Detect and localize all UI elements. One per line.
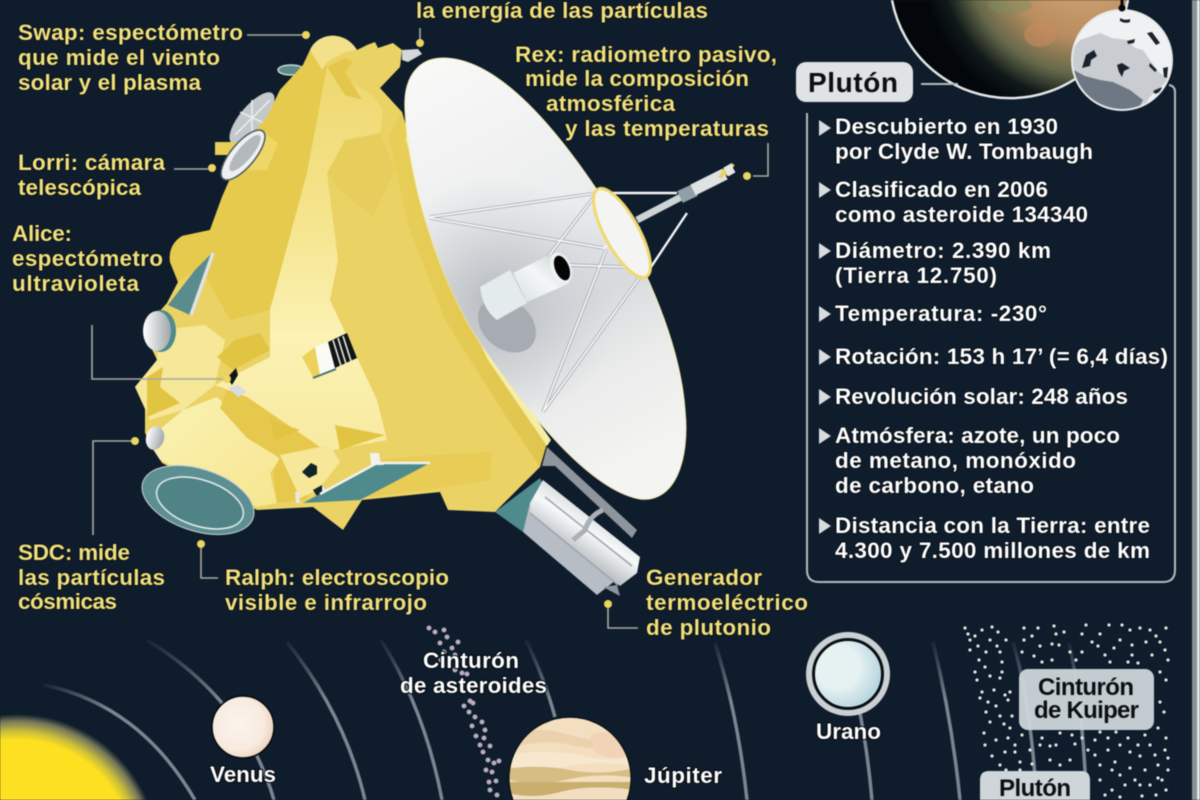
callout: Swap: que mide el viento bbox=[18, 45, 220, 70]
callout: Alice: Alice: bbox=[12, 221, 72, 246]
callout: SDC bbox=[18, 540, 165, 614]
panel: Pluto facts bbox=[796, 62, 1175, 582]
label: Pluto in orbit map bbox=[980, 771, 1090, 800]
callout: Rex bbox=[515, 42, 777, 141]
callout: Lorri bbox=[18, 150, 165, 200]
callout: Ralph: visible e infrarrojo bbox=[225, 590, 427, 615]
leader line and dot: top instrument bbox=[416, 28, 424, 47]
Pluto large globe bbox=[892, 0, 1128, 98]
label: asteroid belt: Cinturón bbox=[423, 648, 519, 673]
dish shading bbox=[405, 58, 686, 499]
leader line and dot: SDC bbox=[93, 437, 139, 535]
leader line and dot: Lorri bbox=[174, 164, 216, 172]
planet: Venus: Venus bbox=[210, 762, 276, 787]
teal panel bbox=[303, 453, 430, 503]
dish instrument shadow bbox=[467, 286, 547, 364]
dish struts shadow bbox=[430, 193, 640, 412]
planet: Uranus: Urano bbox=[816, 719, 881, 744]
callout: Rex: atmosférica bbox=[546, 91, 675, 116]
callout: Rex: Rex: radiometro pasivo, bbox=[515, 42, 777, 67]
dish struts bbox=[430, 193, 687, 412]
fact list: Temperatura: -230° bbox=[835, 301, 1047, 326]
small fittings bbox=[227, 368, 328, 503]
darker diagonal band bbox=[220, 390, 320, 503]
instrument: SDC dish bbox=[133, 453, 263, 547]
callout: Lorri: Lorri: cámara bbox=[18, 150, 165, 175]
fact list: Revolución solar: 248 años bbox=[835, 384, 1128, 409]
label: asteroid belt bbox=[400, 648, 547, 698]
callout: generator: de plutonio bbox=[646, 615, 771, 640]
callout: Alice: espectómetro bbox=[12, 246, 163, 271]
fact list bbox=[835, 114, 1168, 563]
label: Kuiper belt: de Kuiper bbox=[1034, 697, 1139, 724]
pale lower panel bbox=[147, 397, 280, 507]
feed lens bbox=[583, 181, 661, 285]
fact list: Diámetro: 2.390 km bbox=[835, 238, 1051, 263]
callout: Ralph bbox=[225, 565, 449, 615]
leader line and dot: generator bbox=[604, 600, 638, 628]
antenna Rex bbox=[637, 164, 733, 220]
leader line and dot: Rex bbox=[743, 143, 768, 180]
fact list: por Clyde W. Tombaugh bbox=[835, 139, 1093, 164]
fact list: de metano, monóxido bbox=[835, 448, 1076, 473]
callout: Swap bbox=[18, 20, 243, 95]
instrument: striped box bbox=[302, 333, 357, 378]
fact list: Distancia con la Tierra: entre bbox=[835, 513, 1150, 538]
central light strip and pale panel bbox=[215, 67, 387, 450]
leader line and dot: Ralph bbox=[197, 540, 218, 578]
callout: SDC: SDC: mide bbox=[18, 540, 130, 565]
fact list: como asteroide 134340 bbox=[835, 202, 1088, 227]
page edge stripe bbox=[1192, 0, 1200, 800]
left panel shading bbox=[170, 50, 327, 320]
callout: generator: termoeléctrico bbox=[646, 590, 808, 615]
callout: generator bbox=[646, 565, 808, 640]
planet: Jupiter bbox=[505, 715, 722, 800]
callout: generator: Generador bbox=[646, 565, 762, 590]
instrument: SDC lens bbox=[143, 424, 167, 452]
small parts behind body bbox=[215, 49, 422, 155]
callout: Rex: y las temperaturas bbox=[565, 116, 769, 141]
heading: Pluto: Plutón bbox=[808, 67, 898, 98]
fact list: (Tierra 12.750) bbox=[835, 263, 997, 288]
label: Kuiper belt bbox=[1019, 669, 1154, 730]
callout: SDC: las partículas bbox=[18, 565, 165, 590]
label: asteroid belt: de asteroides bbox=[400, 673, 547, 698]
planet: Jupiter: Júpiter bbox=[644, 763, 722, 788]
instrument: Alice spectrometer bbox=[168, 253, 213, 315]
sun bbox=[0, 714, 148, 800]
orbits bbox=[44, 640, 1086, 800]
fact list: Atmósfera: azote, un poco bbox=[835, 423, 1120, 448]
parabolic dish bbox=[405, 58, 686, 499]
callout: Alice: ultravioleta bbox=[12, 271, 139, 296]
callout: Swap: solar y el plasma bbox=[18, 70, 201, 95]
leader line and dot: Alice bbox=[92, 325, 231, 383]
panel border bbox=[807, 85, 1175, 582]
planet: Uranus bbox=[809, 635, 887, 744]
fact list: de carbono, etano bbox=[835, 473, 1034, 498]
label: Kuiper belt: Cinturón bbox=[1038, 674, 1134, 701]
Charon moon bbox=[1068, 0, 1172, 115]
callout: Ralph: Ralph: electroscopio bbox=[225, 565, 449, 590]
fact list: Clasificado en 2006 bbox=[835, 177, 1048, 202]
callout: Swap: Swap: espectómetro bbox=[18, 20, 243, 45]
planet: Venus bbox=[210, 696, 276, 787]
callout: SDC: cósmicas bbox=[18, 589, 117, 614]
yellow body bbox=[135, 36, 547, 530]
callout: Rex: mide la composición bbox=[525, 66, 749, 91]
fact list: Rotación: 153 h 17’ (= 6,4 días) bbox=[835, 344, 1168, 369]
central cylinder instrument bbox=[480, 249, 576, 320]
spacecraft New Horizons bbox=[133, 36, 733, 596]
leader line and dot: Swap bbox=[247, 31, 310, 39]
feather shading bbox=[147, 333, 385, 450]
instrument: left lens bbox=[143, 310, 176, 352]
fact list: 4.300 y 7.500 millones de km bbox=[835, 538, 1150, 563]
callout: Alice bbox=[12, 221, 163, 296]
asteroid belt bbox=[429, 628, 499, 795]
RTG generator bbox=[495, 447, 640, 596]
kuiper belt dots bbox=[965, 625, 1168, 797]
list markers bbox=[819, 120, 831, 534]
instrument: Lorri camera bbox=[214, 124, 278, 186]
callout: Lorri: telescópica bbox=[18, 175, 141, 200]
fact list: Descubierto en 1930 bbox=[835, 114, 1058, 139]
heading: Pluto bbox=[796, 62, 958, 102]
rim shading bbox=[388, 112, 547, 467]
